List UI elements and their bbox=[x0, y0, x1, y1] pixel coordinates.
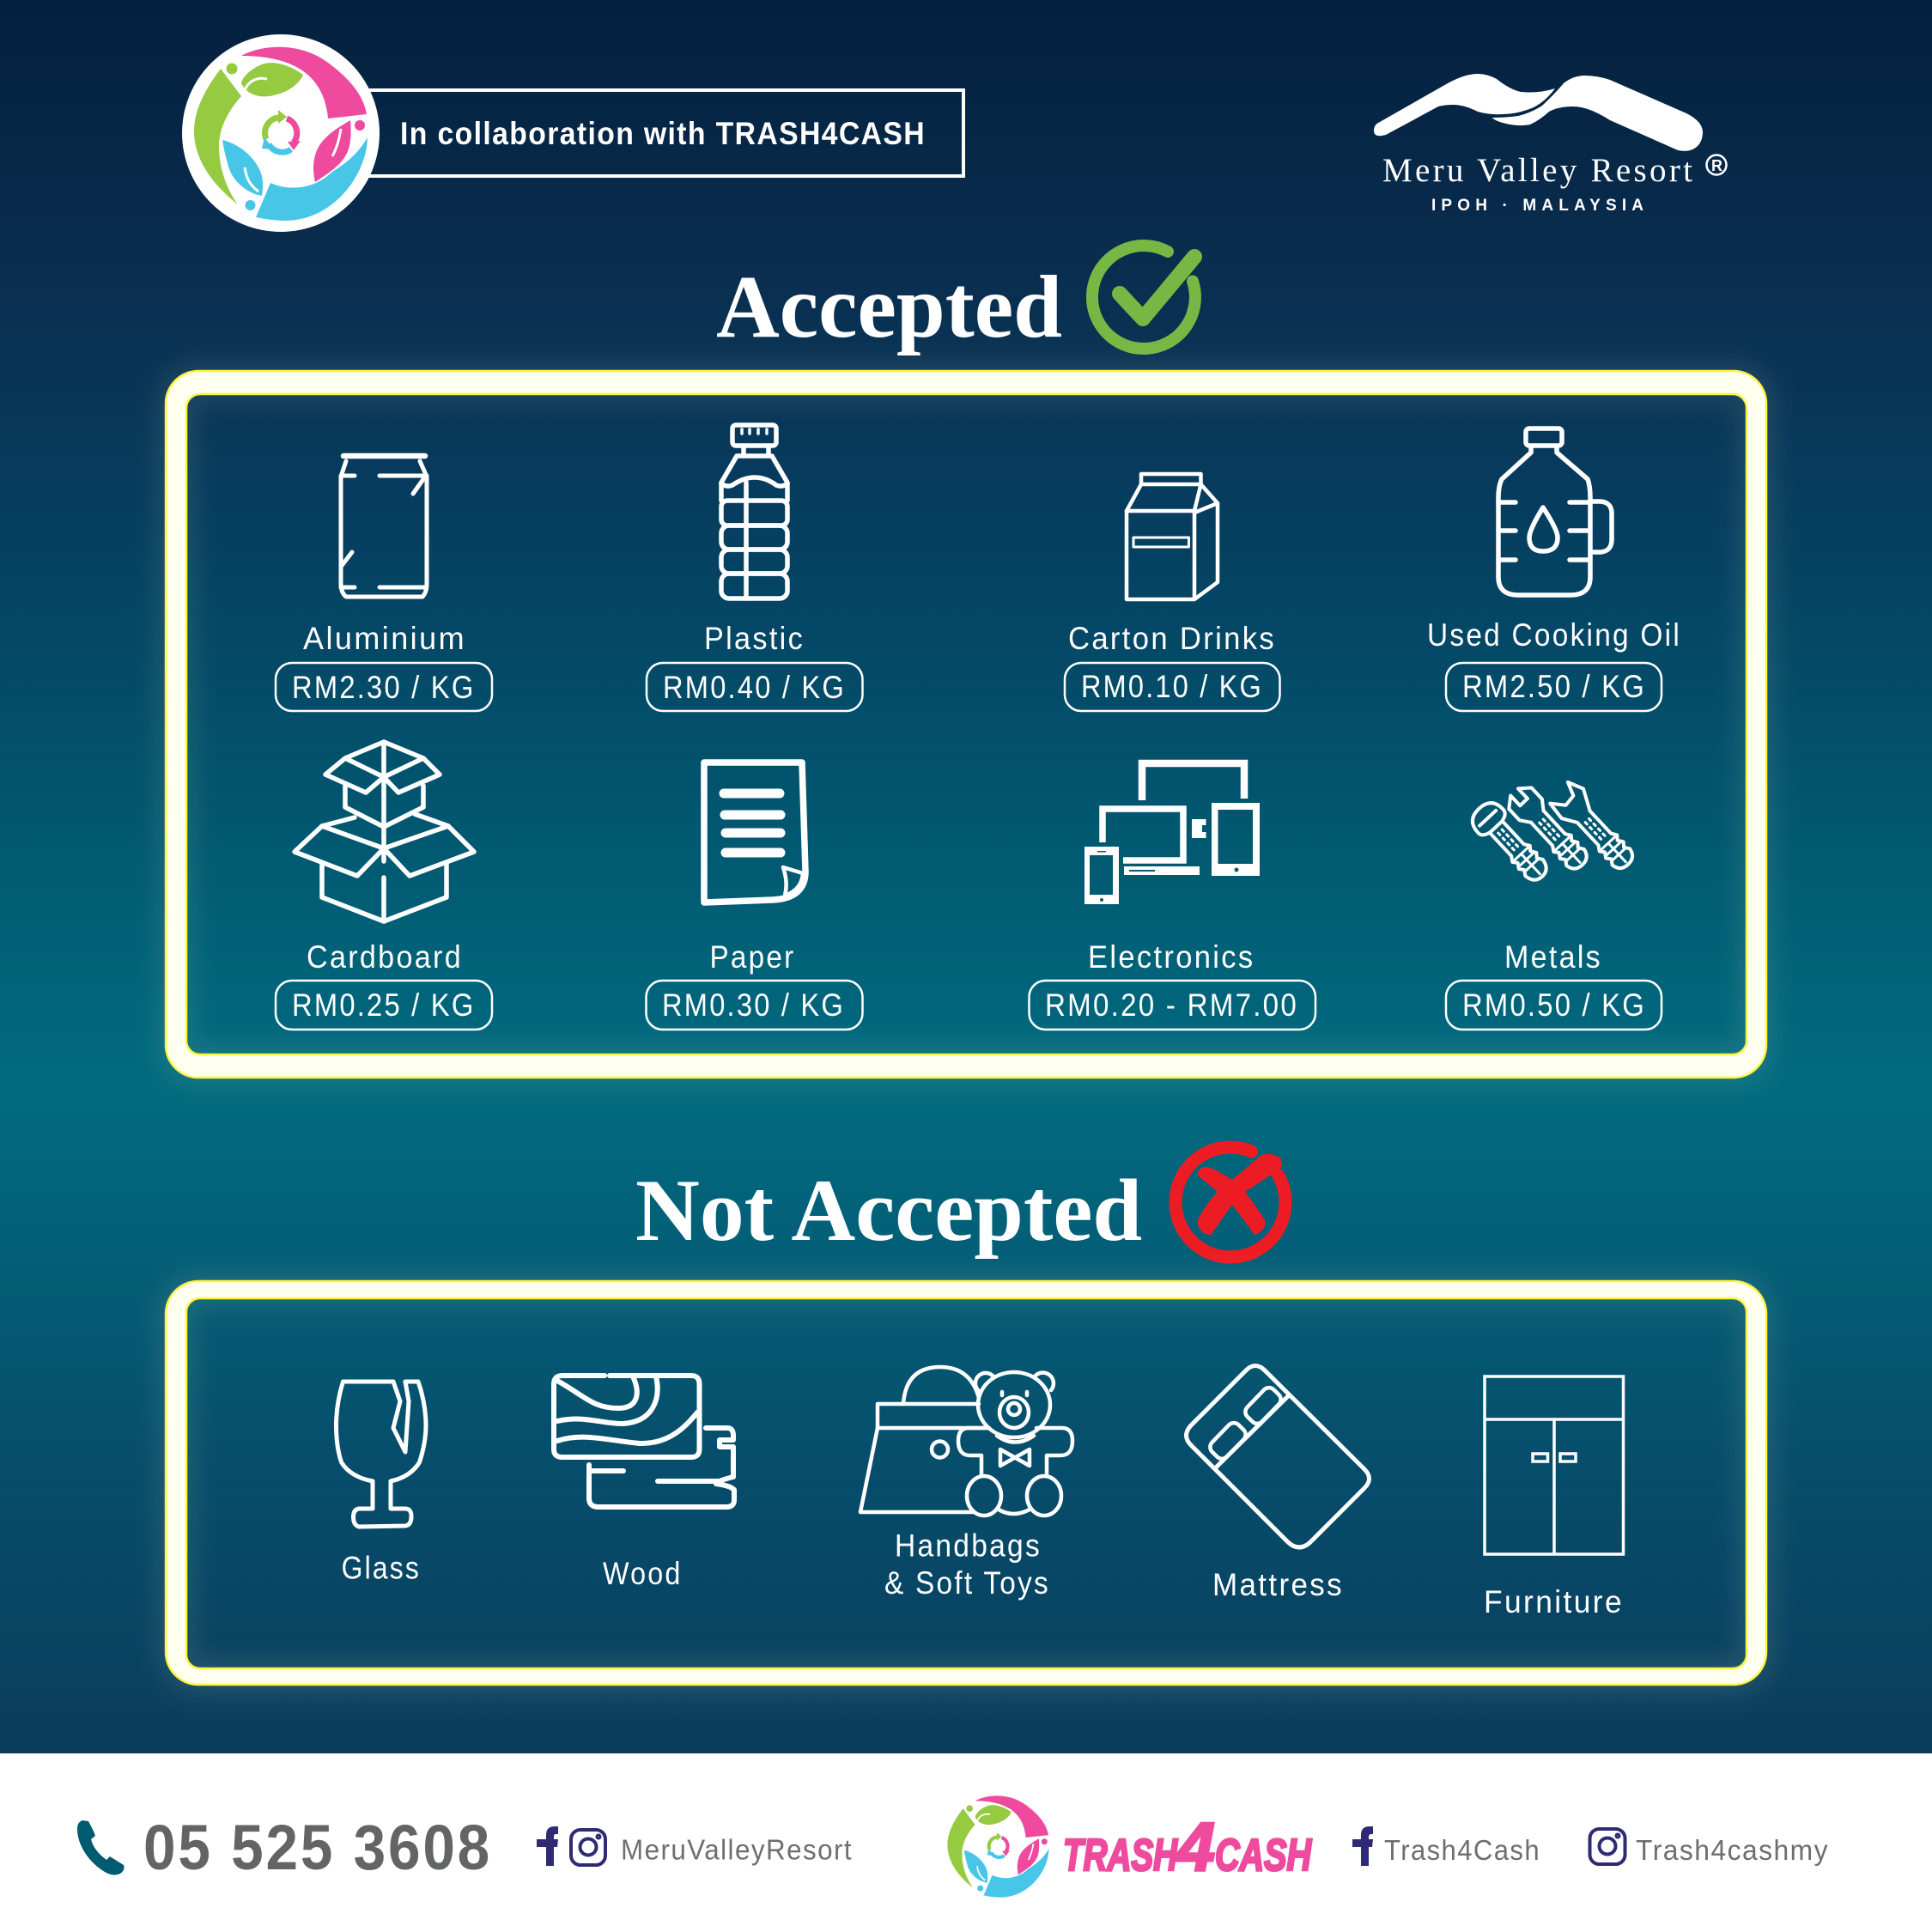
footer: phone number: 05 525 3608 bbox=[143, 1812, 492, 1883]
icon: metal tools bbox=[1467, 777, 1642, 888]
footer: Meru Valley social handles: MeruValleyResort bbox=[621, 1834, 853, 1866]
item: cardboard: Cardboard bbox=[307, 939, 463, 975]
item: plastic: Plastic bbox=[704, 621, 805, 656]
footer background bbox=[0, 1753, 1932, 1932]
price: metals bbox=[1446, 981, 1662, 1030]
price: plastic: RM0.40 / KG bbox=[663, 670, 846, 705]
icon: aluminium can bbox=[341, 456, 427, 597]
logo: Meru Valley Resort bbox=[1374, 74, 1726, 215]
item: furniture: Furniture bbox=[1484, 1584, 1624, 1619]
item: wood: Wood bbox=[603, 1556, 682, 1591]
icon: instagram bbox=[1590, 1829, 1625, 1864]
item: plastic bbox=[647, 425, 862, 711]
icon: mattress bbox=[1187, 1365, 1369, 1547]
item: aluminium bbox=[276, 456, 492, 711]
price: metals: RM0.50 / KG bbox=[1462, 987, 1646, 1023]
icon: sheet of paper bbox=[704, 762, 805, 902]
icon: facebook bbox=[537, 1826, 558, 1866]
price: aluminium: RM2.30 / KG bbox=[292, 670, 476, 705]
price: paper: RM0.30 / KG bbox=[662, 987, 845, 1023]
wordmark: CASH bbox=[1215, 1831, 1312, 1880]
item: handbags and soft toys: & Soft Toys bbox=[884, 1565, 1050, 1601]
icon: facebook bbox=[1352, 1826, 1373, 1866]
item: carton drinks: Carton Drinks bbox=[1068, 621, 1276, 656]
icon: handbag and teddy bear bbox=[860, 1367, 1072, 1516]
price: aluminium bbox=[276, 663, 492, 711]
item: metals bbox=[1446, 777, 1662, 1030]
item: cardboard bbox=[276, 742, 492, 1030]
item: metals: Metals bbox=[1504, 939, 1602, 975]
price: cardboard: RM0.25 / KG bbox=[292, 987, 476, 1023]
footer: Trash4Cash facebook bbox=[1352, 1826, 1540, 1866]
item: wood bbox=[554, 1376, 734, 1591]
footer: Trash4Cash facebook: Trash4Cash bbox=[1384, 1834, 1540, 1866]
icon: telephone bbox=[77, 1820, 124, 1875]
item: glass: Glass bbox=[342, 1551, 421, 1586]
price: electronics bbox=[1029, 981, 1315, 1030]
icon: carton bbox=[1127, 474, 1218, 599]
icon: plastic bottle bbox=[721, 425, 787, 598]
item: aluminium: Aluminium bbox=[303, 621, 466, 656]
icon: wardrobe bbox=[1485, 1376, 1623, 1554]
price: electronics: RM0.20 - RM7.00 bbox=[1045, 987, 1298, 1023]
logo: Meru Valley Resort: R bbox=[1711, 157, 1722, 174]
item: glass bbox=[337, 1382, 426, 1586]
item: electronics bbox=[1029, 763, 1315, 1030]
item: used cooking oil bbox=[1427, 428, 1681, 711]
item: furniture bbox=[1484, 1376, 1624, 1619]
price: carton drinks: RM0.10 / KG bbox=[1081, 669, 1263, 704]
item: handbags and soft toys: Handbags bbox=[895, 1528, 1042, 1564]
icon: oil bottle bbox=[1498, 428, 1612, 595]
price: cardboard bbox=[276, 981, 492, 1030]
footer: Trash4Cash instagram: Trash4cashmy bbox=[1636, 1834, 1829, 1866]
icon: broken glass bbox=[337, 1382, 426, 1527]
item: electronics: Electronics bbox=[1088, 939, 1255, 975]
footer: Trash4Cash logo bbox=[947, 1795, 1312, 1898]
item: handbags and soft toys bbox=[860, 1367, 1072, 1601]
item: mattress bbox=[1187, 1365, 1369, 1602]
logo: Trash4Cash emblem bbox=[182, 34, 380, 232]
icon: green check mark bbox=[1092, 246, 1195, 349]
wordmark: TRASH bbox=[1063, 1831, 1178, 1880]
item: mattress: Mattress bbox=[1212, 1567, 1344, 1602]
emblem bbox=[947, 1795, 1049, 1898]
price: plastic bbox=[647, 663, 862, 711]
icon: stacked boxes bbox=[295, 742, 474, 921]
footer: Meru Valley social handles bbox=[537, 1826, 853, 1866]
panel: accepted items bbox=[166, 371, 1766, 1078]
price: used cooking oil: RM2.50 / KG bbox=[1462, 669, 1646, 704]
wordmark bbox=[1063, 1808, 1312, 1885]
price: used cooking oil bbox=[1446, 663, 1662, 711]
logo: Meru Valley Resort: IPOH · MALAYSIA bbox=[1431, 197, 1643, 215]
heading: Not Accepted: Not Accepted bbox=[635, 1162, 1142, 1260]
heading: Accepted: Accepted bbox=[716, 258, 1062, 356]
banner: in collaboration with Trash4Cash: In collaboration with TRASH4CASH bbox=[400, 116, 926, 151]
logo: Meru Valley Resort: Meru Valley Resort bbox=[1382, 152, 1692, 189]
wordmark: 4 bbox=[1176, 1808, 1215, 1885]
item: paper: Paper bbox=[709, 939, 795, 975]
price: paper bbox=[646, 981, 862, 1030]
banner: in collaboration with Trash4Cash bbox=[343, 90, 963, 176]
price: carton drinks bbox=[1065, 663, 1279, 711]
icon: instagram bbox=[571, 1830, 605, 1865]
icon: wood boards bbox=[554, 1376, 734, 1507]
panel: not accepted items bbox=[166, 1281, 1766, 1685]
icon: red cross bbox=[1176, 1147, 1285, 1257]
footer: Trash4Cash instagram bbox=[1590, 1829, 1829, 1866]
item: paper bbox=[646, 762, 862, 1030]
item: carton drinks bbox=[1065, 474, 1279, 711]
item: used cooking oil: Used Cooking Oil bbox=[1427, 617, 1681, 653]
icon: electronic devices bbox=[1084, 763, 1260, 904]
